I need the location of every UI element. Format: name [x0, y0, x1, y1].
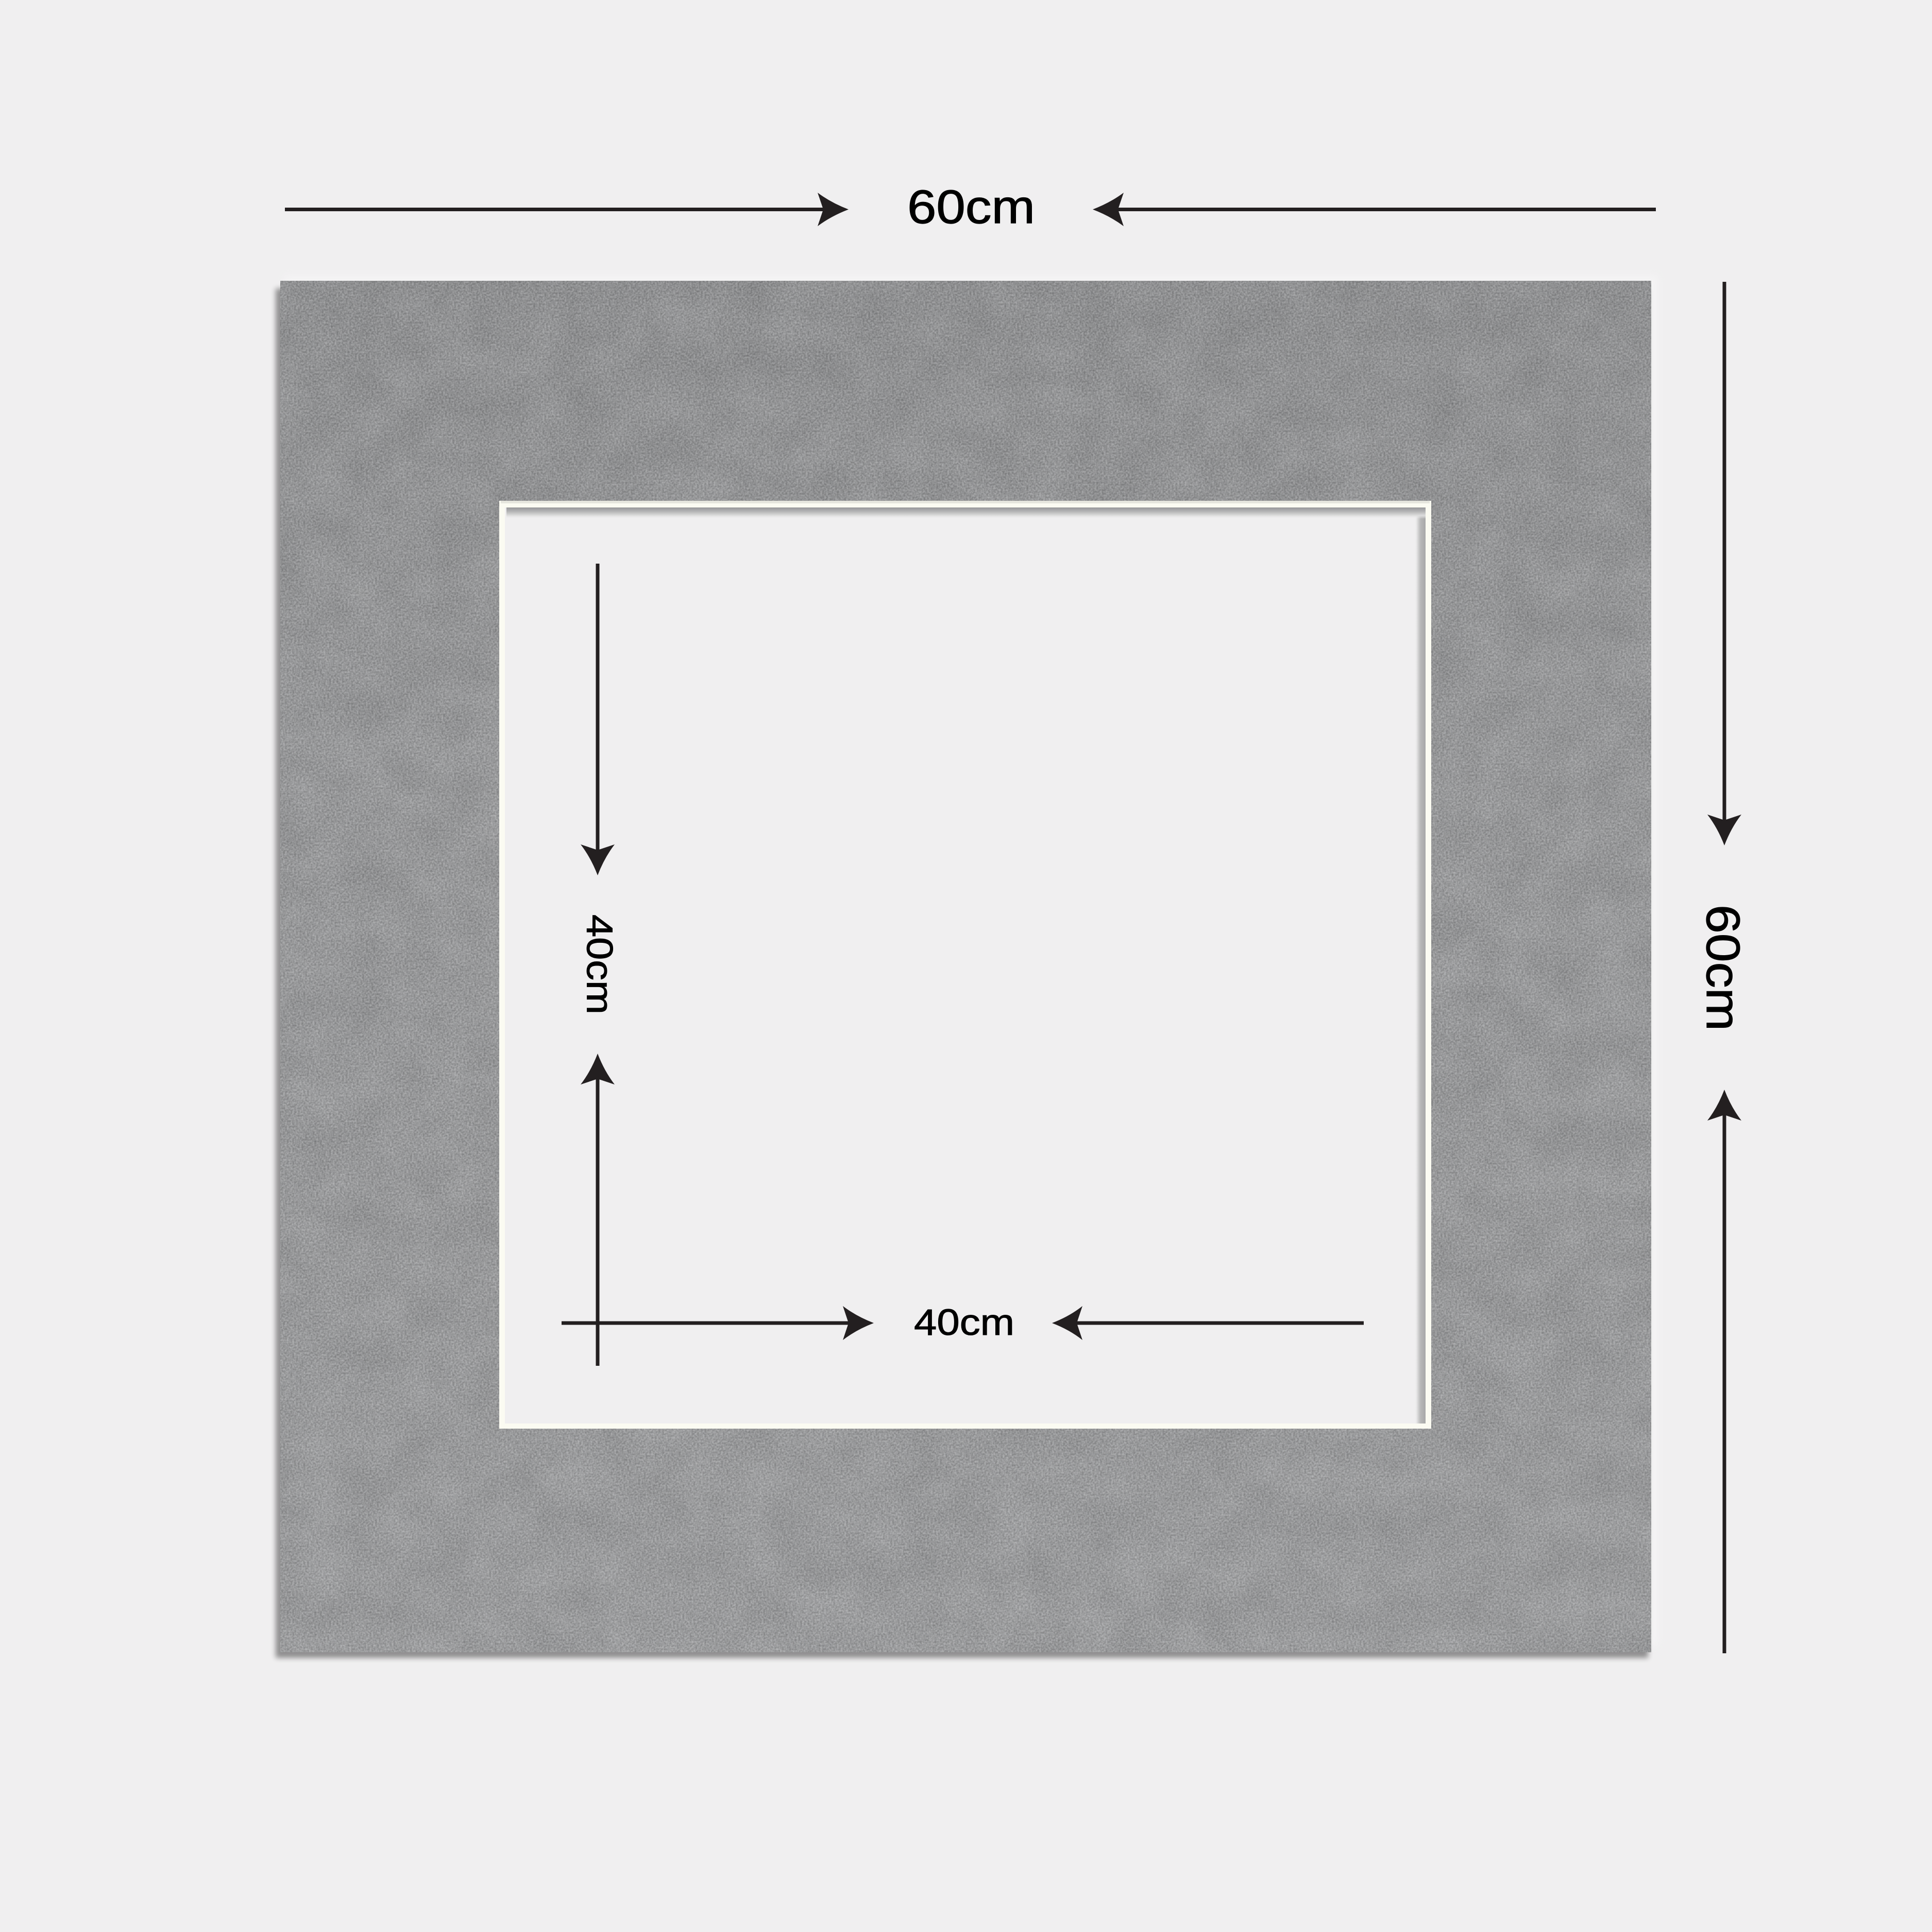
top dimension: right arrow — [1093, 193, 1656, 226]
mount board surface — [280, 281, 1651, 1652]
mount mottled tone — [280, 281, 1651, 1652]
mount drop shadow — [276, 289, 1648, 1658]
mount highlight halo — [284, 275, 1658, 1646]
mount paper grain — [280, 281, 1651, 1652]
aperture opening — [505, 507, 1426, 1423]
aperture width: left arrow — [1052, 1306, 1364, 1340]
aperture right inner shadow — [1415, 507, 1426, 1423]
aperture top bevel edge — [501, 501, 1430, 503]
right dimension: down arrow — [1707, 282, 1741, 845]
right dimension: up arrow — [1707, 1090, 1741, 1653]
aperture bevel — [499, 501, 1431, 1429]
top dimension: left arrow — [285, 193, 849, 226]
aperture height: up arrow — [581, 1054, 615, 1366]
top dimension label: 60cm — [907, 181, 1035, 233]
aperture width label: 40cm — [914, 1302, 1014, 1343]
panel: grey mount board with aperture — [276, 275, 1658, 1658]
aperture height label: 40cm — [579, 914, 619, 1014]
right dimension label: 60cm — [1697, 905, 1749, 1031]
aperture height: down arrow — [581, 564, 615, 875]
aperture top inner shadow — [506, 507, 1426, 519]
aperture width: right arrow — [562, 1306, 874, 1340]
